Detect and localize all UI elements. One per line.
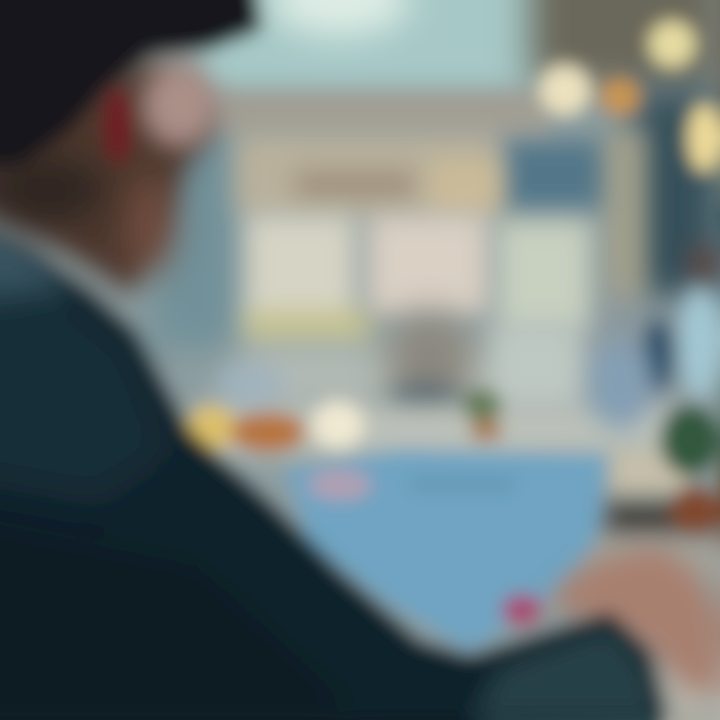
potted plants [462,389,720,535]
blue paper document [285,450,608,650]
person's torso [0,205,668,720]
bokeh lights [188,21,720,449]
background person in blue [588,243,720,430]
person's dark hair [0,0,262,170]
counter and table [200,405,720,720]
orange objects on table [215,363,306,452]
hand holding paper [502,548,720,690]
red ear [104,87,132,163]
shop window panels [240,215,590,412]
storefront canopy [220,90,550,215]
person's face and neck [0,60,218,295]
